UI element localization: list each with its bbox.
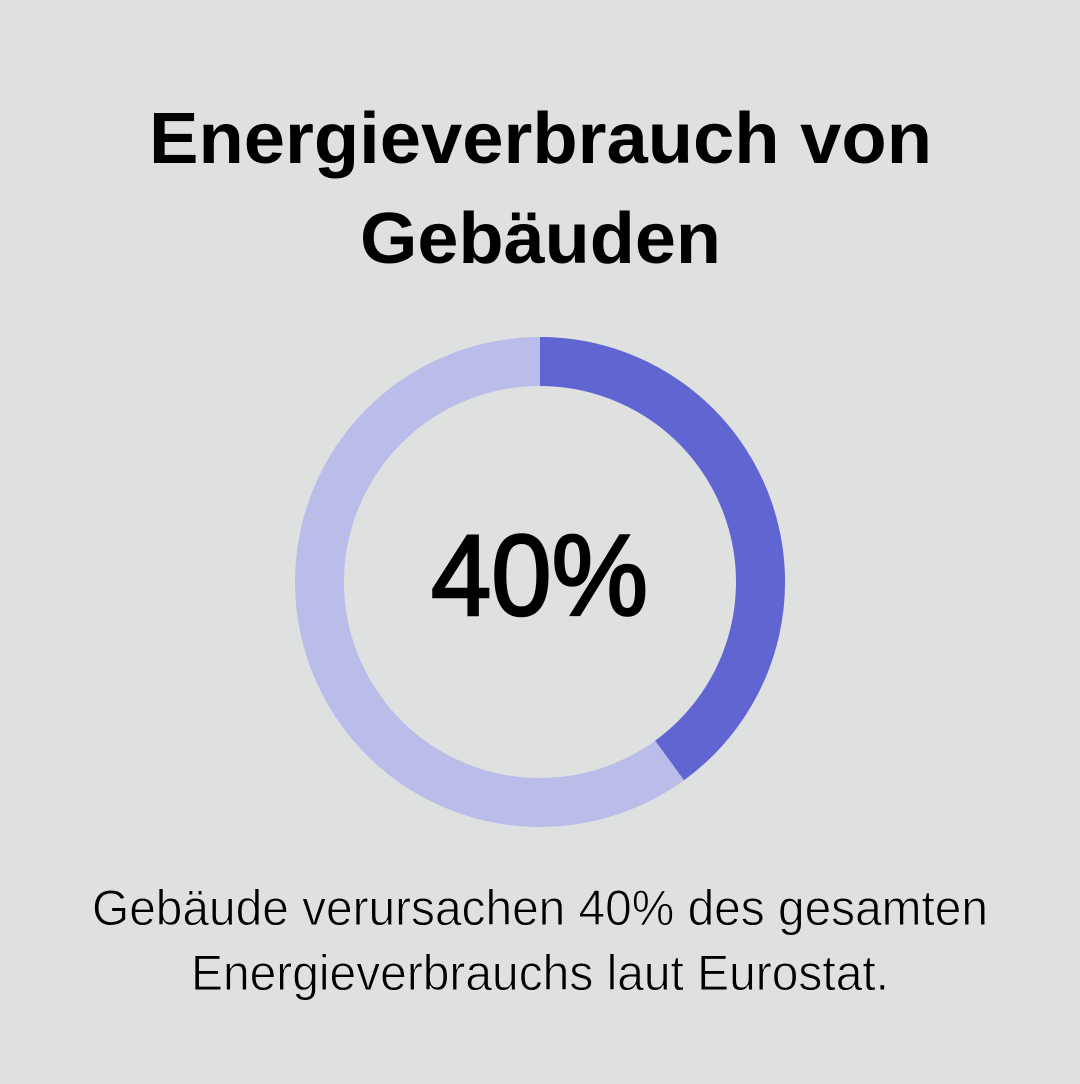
title: Gebäuden: [360, 199, 721, 279]
description text: [92, 880, 988, 1001]
description text: Energieverbrauchs laut Eurostat.: [191, 945, 889, 1001]
donut track: remaining 60%: [320, 362, 760, 802]
donut chart: 40%: [320, 362, 761, 802]
title: [149, 99, 932, 279]
donut segment: 40%: [540, 362, 761, 760]
center value: 40%: [431, 512, 648, 640]
description text: Gebäude verursachen 40% des gesamten: [92, 880, 988, 936]
title: Energieverbrauch von: [149, 99, 932, 179]
